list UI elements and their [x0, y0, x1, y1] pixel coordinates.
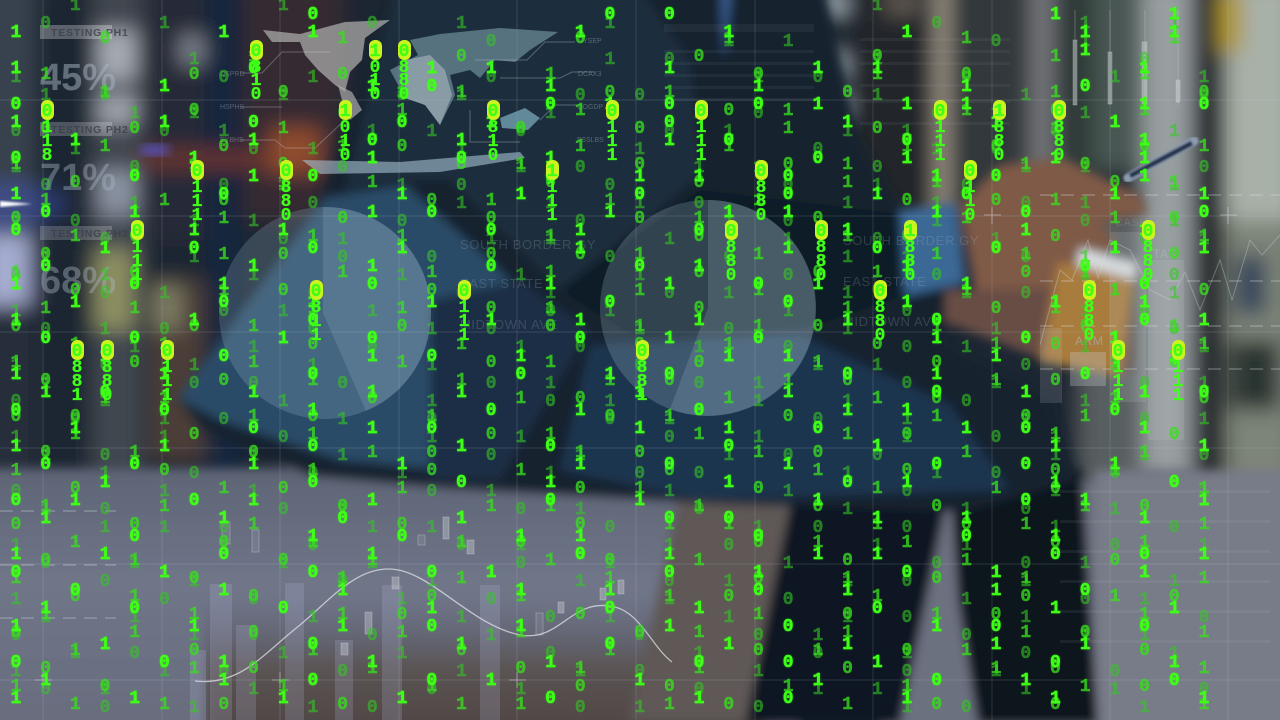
matrix rain: glowing column heads with stacked tails: 0110: [965, 162, 976, 226]
candlesticks upper right: [1073, 10, 1180, 105]
map callout lines and labels: EYBHS: [220, 137, 244, 144]
pie chart right: [600, 200, 816, 416]
faint street labels: EAST STATE: [843, 274, 926, 289]
stat: 45%: 45%: [40, 57, 116, 99]
matrix rain: glowing column heads with stacked tails: 0111: [162, 342, 173, 406]
matrix rain: glowing column heads with stacked tails: 0111: [132, 222, 143, 286]
faint street labels: CASH: [1115, 217, 1148, 229]
matrix rain: glowing column heads with stacked tails: 0810: [488, 102, 499, 166]
matrix rain: glowing column heads with stacked tails: 0111: [935, 102, 946, 166]
matrix rain: glowing column heads with stacked tails: 1880: [994, 102, 1005, 166]
matrix rain: glowing column heads with stacked tails: 0111: [607, 102, 618, 166]
matrix rain: glowing column heads with stacked tails: 1010: [340, 102, 351, 166]
matrix rain: glowing column heads with stacked tails: 0880: [1143, 222, 1153, 286]
faint street labels: ARM: [1075, 334, 1103, 348]
matrix rain: glowing column heads with stacked tails: 0880: [726, 222, 736, 286]
matrix rain: glowing column heads with stacked tails: 0118: [42, 102, 53, 166]
matrix rain: glowing column heads with stacked tails: 0880: [102, 342, 112, 406]
matrix rain: bright foreground layer of binary digits: 0 0 0 1 1 1 1 1 1 1 1 1 1 1 1 0 1 1 1 1 1 1 1 1 0 1 1 1 0 0 0 1 0 0 1 1 1 1 0 1 1 0 0 1 0 1 1 1 1 1 0 1 1 0 0 1 0 1 1 0 1 0 1 1 1 0 1 0 0 1 1 0 1 0 1 1 0 1 1 0 0 1 0 1 1 0 1 1 0 1 1 1 1 0 0 0 1 1 0 1 0 1 1 1 1 0 0 1 1 1 0 0 1 1 0 1 1 0 0 1 1 0 1 0 1 0 1 1 0 1 1 0 1 0 1 1 0 0 1 1 1 1 1 0 1 1 1 1 0 0 1 0 0 1 0 0 1 0 1 0 1 1 0 1 0 1 1 1 1 1 1 1 0 0 1 0 0 1 0 1 0 1 1 1 1 1 0 1 1 0 0 0 1 0 1 0 1 1 0 1 0 1 0 1 1 0 1 0 1 1 1 0 1 0 0 1 1 1 0 0 1 1 1 0 1 0 0 1 1 0 0 1 1 0 1 1 0 0 1 0 1 1 0 1 1 0 1 1 1 1 0 1 0 0 1 1 1 0 1 0 1 1 0 0 1 1 1 0 1 0 1 1 1 0 0 1 0 1 0 0 1 0 1 0 1 1 0 1 1 1 1 0 1 1 0 1 0 0 1 0 1 0 1 1 1 1 1 0 1 1 0 1 0 0 1 0 1 0 1 1 1 1 0 0 1 1 1 0 0 1 0 1 1 1 0 0 1 1 1 0 1 0 1 1 1 1 0 1 0 1 1 1: [10, 5, 1228, 709]
faint street labels: MIDTOWN AVE: [843, 314, 941, 329]
matrix rain: glowing column heads with stacked tails: 0111: [696, 102, 707, 166]
matrix rain: glowing column heads with stacked tails: 0880: [756, 162, 766, 226]
faint data text block upper middle: [664, 24, 1010, 125]
matrix rain: glowing column heads with stacked tails: 0880: [875, 282, 885, 346]
matrix rain: glowing column heads with stacked tails: 0880: [281, 162, 291, 226]
map callout lines and labels: DCAX3: [578, 71, 601, 78]
faint street labels: SOUTH BORDER GY: [843, 233, 979, 248]
faint street labels: TAT: [1153, 247, 1176, 261]
map callout lines and labels: HSPHS: [220, 104, 244, 111]
matrix rain: dim background layer of binary digits: 1 1 1 0 1 0 1 1 0 1 1 0 1 1 0 1 1 1 1 0 1 0 1 0 1 0 1 0 0 1 1 1 0 1 0 1 0 0 1 1 0 1 1 0 1 1 0 0 1 1 0 0 1 1 1 0 0 1 1 1 0 1 1 0 1 1 1 0 1 0 1 1 0 1 0 1 0 1 1 0 1 1 0 0 0 1 1 0 0 0 1 0 1 1 0 1 1 1 0 1 1 0 1 1 0 1 1 0 0 1 0 1 0 1 0 0 1 1 1 1 1 0 1 0 1 1 1 0 0 0 0 1 1 0 1 0 1 1 1 1 1 0 0 1 0 0 1 0 0 1 0 1 1 1 0 1 1 0 1 1 0 1 1 0 1 0 0 1 0 0 1 0 1 0 1 1 0 1 1 0 1 0 1 0 0 1 1 1 1 0 1 1 1 0 1 1 0 1 1 0 0 0 0 1 0 1 0 1 0 1 0 1 1 1 0 1 1 1 0 1 0 1 0 1 0 0 1 0 1 1 0 1 1 1 0 1 1 0 1 1 0 1 1 0 1 1 0 1 1 0 0 1 1 0 1 0 0 1 1 0 0 1 1 0 0 0 1 1 0 1 1 1 0 1 1 1 0 0 1 0 1 0 1 1 0 1 1 1 0 1 1 0 1 0 0 1 0 1 1 0 0 1 1 0 1 1 0 1 0 1 1 1 0 1 1 0 0 1 0 1 0 1 1 0 1 1 0 1 1 1 0 0 1 0 1 0 1 0 1 1 1 1 1 0 1 1 1 0 1 0 0 1 0 0 1 0 0 1 0 1 1 1 0 1 1 0 1 0 1 0 1 1 1 0 0 1 1 0 1 0 1 0 0 1 1 0 1 0 1 1 1 1 0 0 1 1 0 0 1 0 1 0 1: [10, 0, 1258, 718]
translucent bars right: [1040, 232, 1184, 440]
map callout lines and labels: [220, 38, 604, 148]
line chart right: [1040, 235, 1280, 345]
map callout lines and labels: FSSLBS: [577, 137, 604, 144]
lens flare: [0, 144, 171, 228]
lower right faint text block: [1060, 490, 1270, 643]
matrix rain: glowing column heads with stacked tails: 0111: [1113, 342, 1124, 406]
faint street labels: [460, 217, 1176, 348]
bar chart lower left: [190, 583, 500, 720]
matrix rain: glowing column heads with stacked tails: 0811: [311, 282, 322, 346]
faint street labels: EAST STATE: [460, 276, 543, 291]
matrix rain: glowing column heads with stacked tails: 1111: [547, 162, 558, 226]
matrix rain: glowing column heads with stacked tails: 0111: [1173, 342, 1184, 406]
label: testing ph3: TESTING PH3: [51, 228, 129, 240]
faint street labels: MIDTOWN AVE: [460, 317, 558, 332]
matrix rain: glowing column heads with stacked tails: 0880: [1054, 102, 1064, 166]
panel: testing percentages: [40, 25, 129, 302]
label: testing ph1: TESTING PH1: [51, 27, 129, 39]
matrix rain: glowing column heads with stacked tails: 0880: [816, 222, 826, 286]
phone: [1128, 141, 1194, 178]
stat: 68%: 68%: [40, 260, 116, 302]
matrix rain: glowing column heads with stacked tails: 1010: [370, 42, 381, 105]
stat: 71%: 71%: [40, 157, 116, 199]
matrix rain: glowing column heads with stacked tails: 0111: [459, 282, 470, 346]
candlestick chart lower: [222, 517, 624, 655]
world map: [263, 20, 558, 174]
map callout lines and labels: DSPRD: [220, 71, 245, 78]
label: testing ph2: TESTING PH2: [51, 124, 129, 136]
matrix rain: glowing column heads with stacked tails: 0880: [399, 42, 409, 105]
pie chart left: [219, 207, 431, 419]
matrix rain: glowing column heads with stacked tails: 0881: [637, 342, 648, 406]
matrix rain: glowing column heads with stacked tails: 0810: [251, 42, 262, 105]
matrix rain: middle layer of binary digits: 0 1 0 1 1 1 1 0 0 0 1 1 0 0 1 0 1 0 1 1 0 1 1 0 1 0 1 0 0 1 1 0 1 1 0 1 0 0 1 0 0 1 0 1 1 0 1 0 1 1 1 0 0 1 1 1 0 0 1 0 0 1 1 0 0 1 1 0 0 1 1 0 1 1 1 0 0 1 1 1 0 0 1 0 1 0 0 0 1 0 1 1 0 1 0 1 1 1 0 1 0 0 1 0 1 0 0 0 1 1 1 1 0 1 0 1 1 1 0 0 1 0 1 0 1 0 0 1 1 0 1 1 0 1 1 1 1 0 1 0 1 0 1 0 0 1 0 0 1 1 0 1 0 1 1 1 0 1 0 1 0 1 0 1 1 0 1 1 0 1 0 1 0 1 0 0 0 1 1 1 0 1 0 1 0 1 1 0 1 0 1 1 0 1 0 0 0 1 0 1 0 1 0 1 0 1 1 0 1 0 1 1 1 0 1 0 0 1 0 1 0 1 0 1 0 1 1 1 0 1 0 1 0 1 0 0 1 0 1 0 1 0 1 0 1 1 0 1 1 1 0 1 1 1 0 0 1 0 0 0 1 0 0 1 1 1 0 1 1 1 0 1 1 0 0 1 1 0 1 0 1 0 1 1 0 1 0 1 0 1 0 1 1 1 0 1 0 1 1 0 1 0 0 1 1 0 1 0 1 0 1 1 1 0 0 1 0 1 0 1 0 1 0 1 1 0 1 1 1 0 1 1 0 1 0 1 0 1 0 1 0 0 1 0 1 0 1 1 0 1 0 1 1 0 1 1 0 0 1 1 1 0 1 1 0 0 1 1 1 0 1 0 0 1: [10, 29, 1228, 715]
line curve lower left: [195, 569, 672, 682]
matrix rain: glowing column heads with stacked tails: 0111: [192, 162, 203, 226]
matrix rain: glowing column heads with stacked tails: 1880: [905, 222, 916, 286]
matrix rain: glowing column heads with stacked tails: 0881: [72, 342, 83, 406]
map callout lines and labels: NYSEP: [578, 38, 602, 45]
faint street labels: SOUTH BORDER GY: [460, 237, 596, 252]
map callout lines and labels: GOGDP: [577, 104, 603, 111]
matrix rain: glowing column heads with stacked tails: 0880: [1084, 282, 1094, 346]
